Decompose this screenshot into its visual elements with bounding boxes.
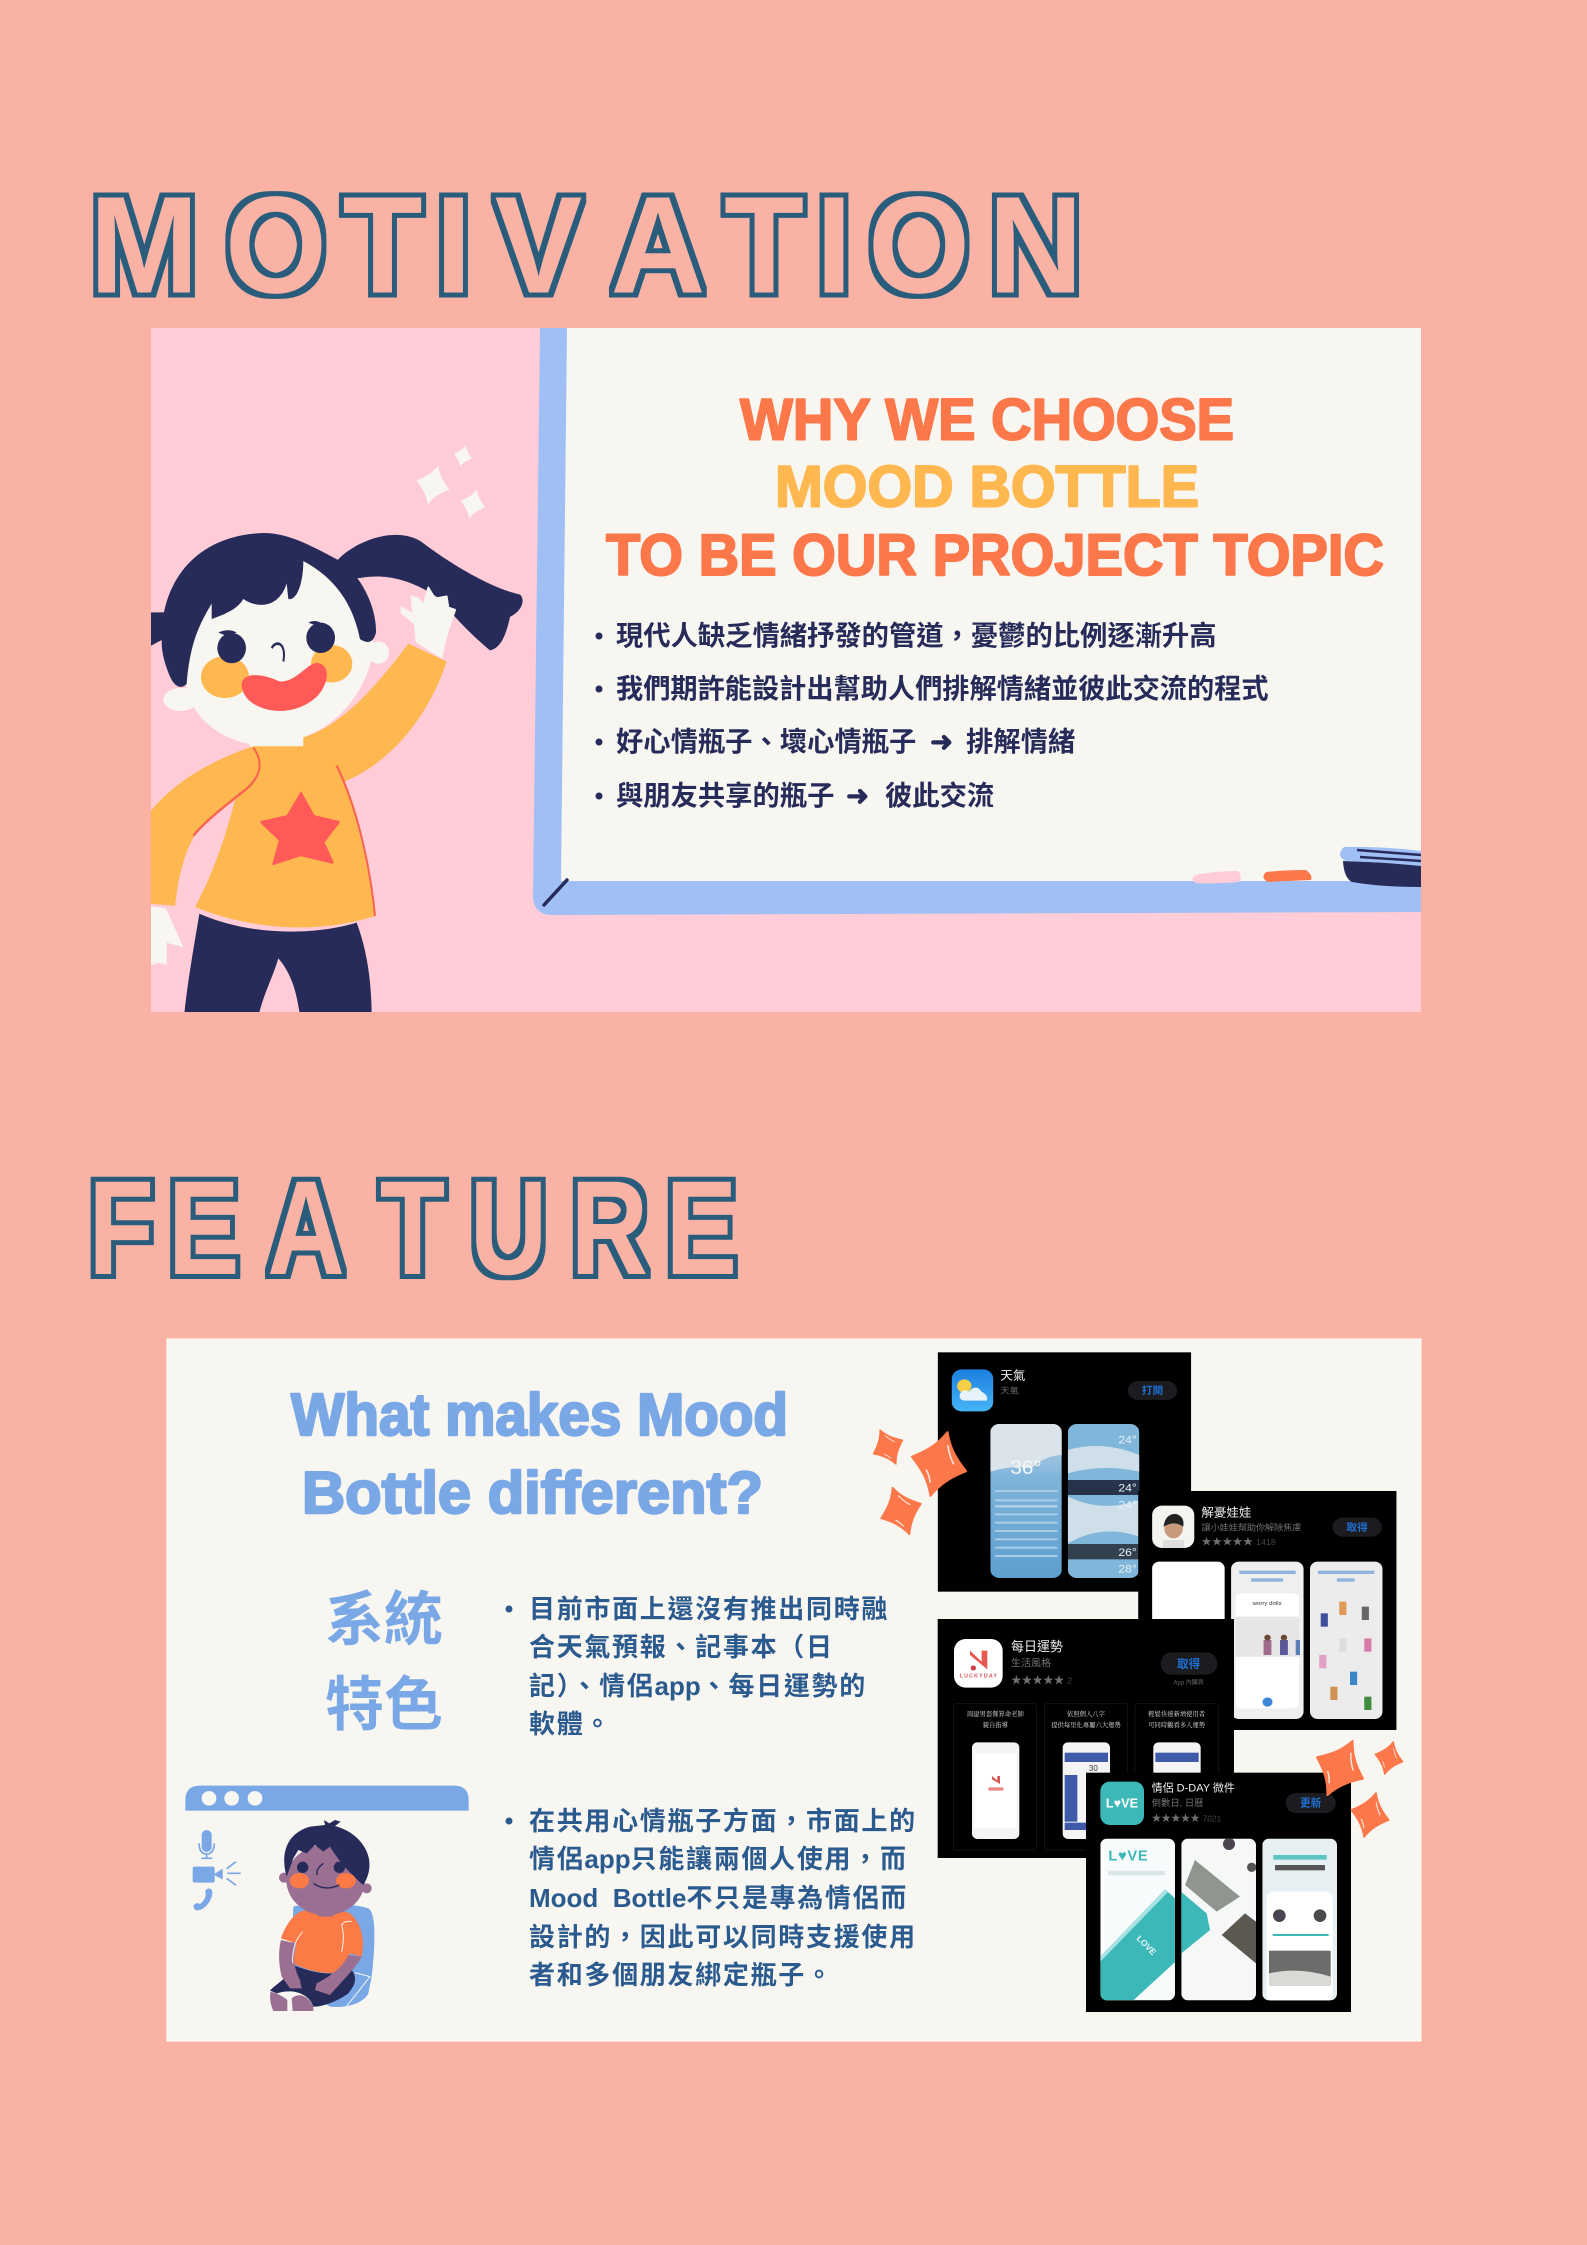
bullet 3: 好心情瓶子、壞心情瓶子 <box>616 726 916 757</box>
bullet 4 <box>596 780 994 811</box>
ponytail <box>337 535 523 650</box>
open button: 打開 <box>1142 1384 1163 1397</box>
text block: feature point 2: Mood Bottle不只是專為情侶而 <box>529 1883 908 1913</box>
panel: why we choose mood bottle <box>151 328 1421 1016</box>
boy legs <box>270 1992 313 2011</box>
mouth <box>242 663 327 711</box>
boy arms <box>279 1940 362 1995</box>
panel: what makes mood bottle different <box>167 1339 1421 2041</box>
update button <box>1286 1793 1336 1813</box>
heading: what makes mood bottle different <box>291 1382 788 1526</box>
whiteboard frame <box>533 328 1421 915</box>
app name: 天氣 <box>1000 1369 1025 1382</box>
get button: 取得 <box>1177 1657 1201 1671</box>
screenshot captions: 親自指導 <box>983 1720 1009 1729</box>
app icon: love <box>1100 1782 1144 1825</box>
rating: ★★★★★ 2 <box>1011 1674 1072 1686</box>
phone 1 <box>972 1742 1019 1839</box>
ears <box>163 641 389 711</box>
raised hand <box>402 588 455 657</box>
weather screen 2: 26° <box>1118 1546 1137 1559</box>
boy hair <box>284 1820 370 1885</box>
screenshot 1 <box>1152 1562 1225 1662</box>
neck <box>250 738 304 748</box>
bullet 2: 我們期許能設計出幫助人們排解情緒並彼此交流的程式 <box>616 673 1269 704</box>
screenshot captions <box>967 1709 1206 1729</box>
cheeks <box>201 645 352 698</box>
label: system features <box>325 1587 443 1738</box>
app subtitle: 生活風格 <box>1011 1657 1051 1670</box>
screenshot 2: worry dolls <box>1252 1601 1282 1607</box>
screenshot captions: 周建男套餐算命老師 <box>967 1709 1024 1718</box>
sweater <box>151 644 447 927</box>
app icon: doll <box>1152 1506 1194 1548</box>
heading line 1: What makes Mood <box>291 1382 788 1448</box>
icon: phone <box>194 1889 212 1910</box>
app icon: weather <box>952 1369 993 1411</box>
bullet 4: ➜ <box>846 780 869 811</box>
weather screen 1: 36° <box>1010 1458 1042 1479</box>
screenshot 2 <box>1175 1838 1256 2000</box>
phone 2 <box>1063 1742 1110 1839</box>
fringe hair <box>162 533 376 687</box>
label: system features: 系統 <box>325 1587 443 1653</box>
card: daily fortune app <box>938 1619 1234 1858</box>
title: FEATURE: FEATURE <box>88 1153 737 1303</box>
phone 3 <box>1153 1742 1201 1839</box>
heading line 2: MOOD BOTTLE <box>775 454 1199 520</box>
screenshot 1: L♥VE <box>1108 1849 1148 1865</box>
bullet 3: 排解情緒 <box>966 726 1075 757</box>
bullet list: motivation <box>596 620 1269 811</box>
heading line 1: WHY WE CHOOSE <box>740 388 1234 452</box>
icon: video camera <box>193 1862 241 1885</box>
sweater seams <box>193 748 375 916</box>
face <box>184 557 373 746</box>
screenshot captions: 輕鬆快速新增使用者 <box>1148 1709 1206 1718</box>
sparkles: orange group left <box>865 1423 975 1542</box>
pink chalk <box>1192 871 1241 883</box>
get button <box>1161 1652 1217 1675</box>
board eraser <box>1340 847 1421 887</box>
lower hand <box>151 906 183 965</box>
text block: feature point 1 <box>506 1594 889 1739</box>
app subtitle: 讓小娃娃幫助你解除焦慮 <box>1201 1522 1301 1533</box>
app name: 解憂娃娃 <box>1201 1506 1251 1520</box>
boy shirt <box>281 1910 363 1973</box>
card: couple d-day app <box>1086 1773 1351 2012</box>
boy shorts <box>270 1965 355 2007</box>
bullet 3: ➜ <box>930 726 953 757</box>
seat <box>290 1904 374 2008</box>
phone 2: 30 <box>1089 1764 1098 1773</box>
text block: feature point 1: 合天氣預報、記事本（日 <box>529 1632 834 1662</box>
screenshot 2 <box>1231 1562 1304 1719</box>
screenshot captions: 依照個人八字 <box>1067 1709 1106 1718</box>
text block: feature point 2: 設計的，因此可以同時支援使用 <box>529 1922 917 1952</box>
get button <box>1332 1518 1382 1537</box>
sparkles: orange group right <box>1304 1730 1407 1842</box>
app subtitle: 倒數日, 日曆 <box>1152 1797 1203 1808</box>
marker mark on frame <box>544 880 567 905</box>
app icon: love: L♥VE <box>1106 1797 1138 1811</box>
label: system features: 特色 <box>325 1672 443 1738</box>
eyes <box>217 621 335 663</box>
text block: feature point 2: 在共用心情瓶子方面，市面上的 <box>529 1806 917 1836</box>
card: weather app <box>938 1352 1191 1592</box>
text block: feature point 2 <box>506 1806 917 1990</box>
app subtitle: 天氣 <box>1000 1385 1019 1395</box>
rating: ★★★★★ 7021 <box>1152 1813 1222 1824</box>
star on sweater <box>261 793 339 864</box>
in app purchase note: App 內購買 <box>1174 1679 1204 1687</box>
text block: feature point 1: 記）、情侶app、每日運勢的 <box>529 1671 867 1701</box>
bullet 4: 與朋友共享的瓶子 <box>616 780 834 811</box>
illustration: girl <box>151 533 523 1016</box>
heading: why we choose mood bottle <box>606 388 1384 588</box>
weather screen 1 <box>990 1424 1062 1578</box>
text block: feature point 2: 者和多個朋友綁定瓶子。 <box>529 1960 834 1990</box>
whiteboard surface <box>555 328 1421 888</box>
update button: 更新 <box>1300 1797 1322 1810</box>
screenshot 1 <box>1100 1838 1175 2000</box>
weather screen 2: 24° <box>1118 1434 1137 1446</box>
card: relief doll app <box>1138 1491 1396 1730</box>
shirt highlights <box>293 1921 352 1963</box>
boy face <box>290 1862 356 1888</box>
bullet 3 <box>596 726 1075 757</box>
get button: 取得 <box>1346 1521 1368 1534</box>
app name: 每日運勢 <box>1011 1639 1063 1654</box>
app name: 情侶 D-DAY 微件 <box>1152 1781 1235 1795</box>
boy head <box>279 1845 372 1917</box>
text block: feature point 1: 軟體。 <box>529 1709 612 1739</box>
bullet 4: 彼此交流 <box>885 780 994 811</box>
orange chalk <box>1263 870 1311 882</box>
panel background <box>151 328 1421 1012</box>
browser bar <box>185 1786 469 1811</box>
screenshot 3 <box>1310 1562 1382 1719</box>
weather screen 2: 28° <box>1118 1563 1137 1576</box>
heading line 2: Bottle different? <box>302 1460 763 1526</box>
weather screen 2: 24° <box>1118 1482 1137 1495</box>
screenshot frames <box>953 1703 1218 1850</box>
illustration: video call with boy <box>185 1786 469 2011</box>
open button <box>1128 1381 1177 1400</box>
screenshot captions: 提供每里化專屬六大運勢 <box>1051 1720 1121 1729</box>
heading line 3: TO BE OUR PROJECT TOPIC <box>606 523 1384 588</box>
rating: ★★★★★ 1418 <box>1201 1537 1276 1548</box>
screenshot captions: 可同時觀看多人運勢 <box>1148 1720 1206 1729</box>
left pigtail <box>151 612 165 646</box>
sparkles <box>416 446 486 518</box>
bullet 1: 現代人缺乏情緒抒發的管道，憂鬱的比例逐漸升高 <box>616 620 1217 651</box>
screenshot 3 <box>1262 1839 1337 2002</box>
weather screen 2: 24° <box>1118 1499 1137 1511</box>
app icon: lucky day <box>954 1639 1003 1688</box>
text block: feature point 1: 目前市面上還沒有推出同時融 <box>529 1594 889 1624</box>
screenshot 1: LOVE <box>1135 1933 1158 1957</box>
app icon: lucky day: LUCKYDAY <box>960 1673 997 1679</box>
text block: feature point 2: 情侶app只能讓兩個人使用，而 <box>529 1844 908 1874</box>
icon: microphone <box>199 1830 214 1858</box>
trousers <box>184 914 372 1016</box>
title: MOTIVATION: MOTIVATION <box>89 167 1083 322</box>
nose <box>272 644 284 661</box>
weather screen 2 <box>1068 1424 1139 1578</box>
